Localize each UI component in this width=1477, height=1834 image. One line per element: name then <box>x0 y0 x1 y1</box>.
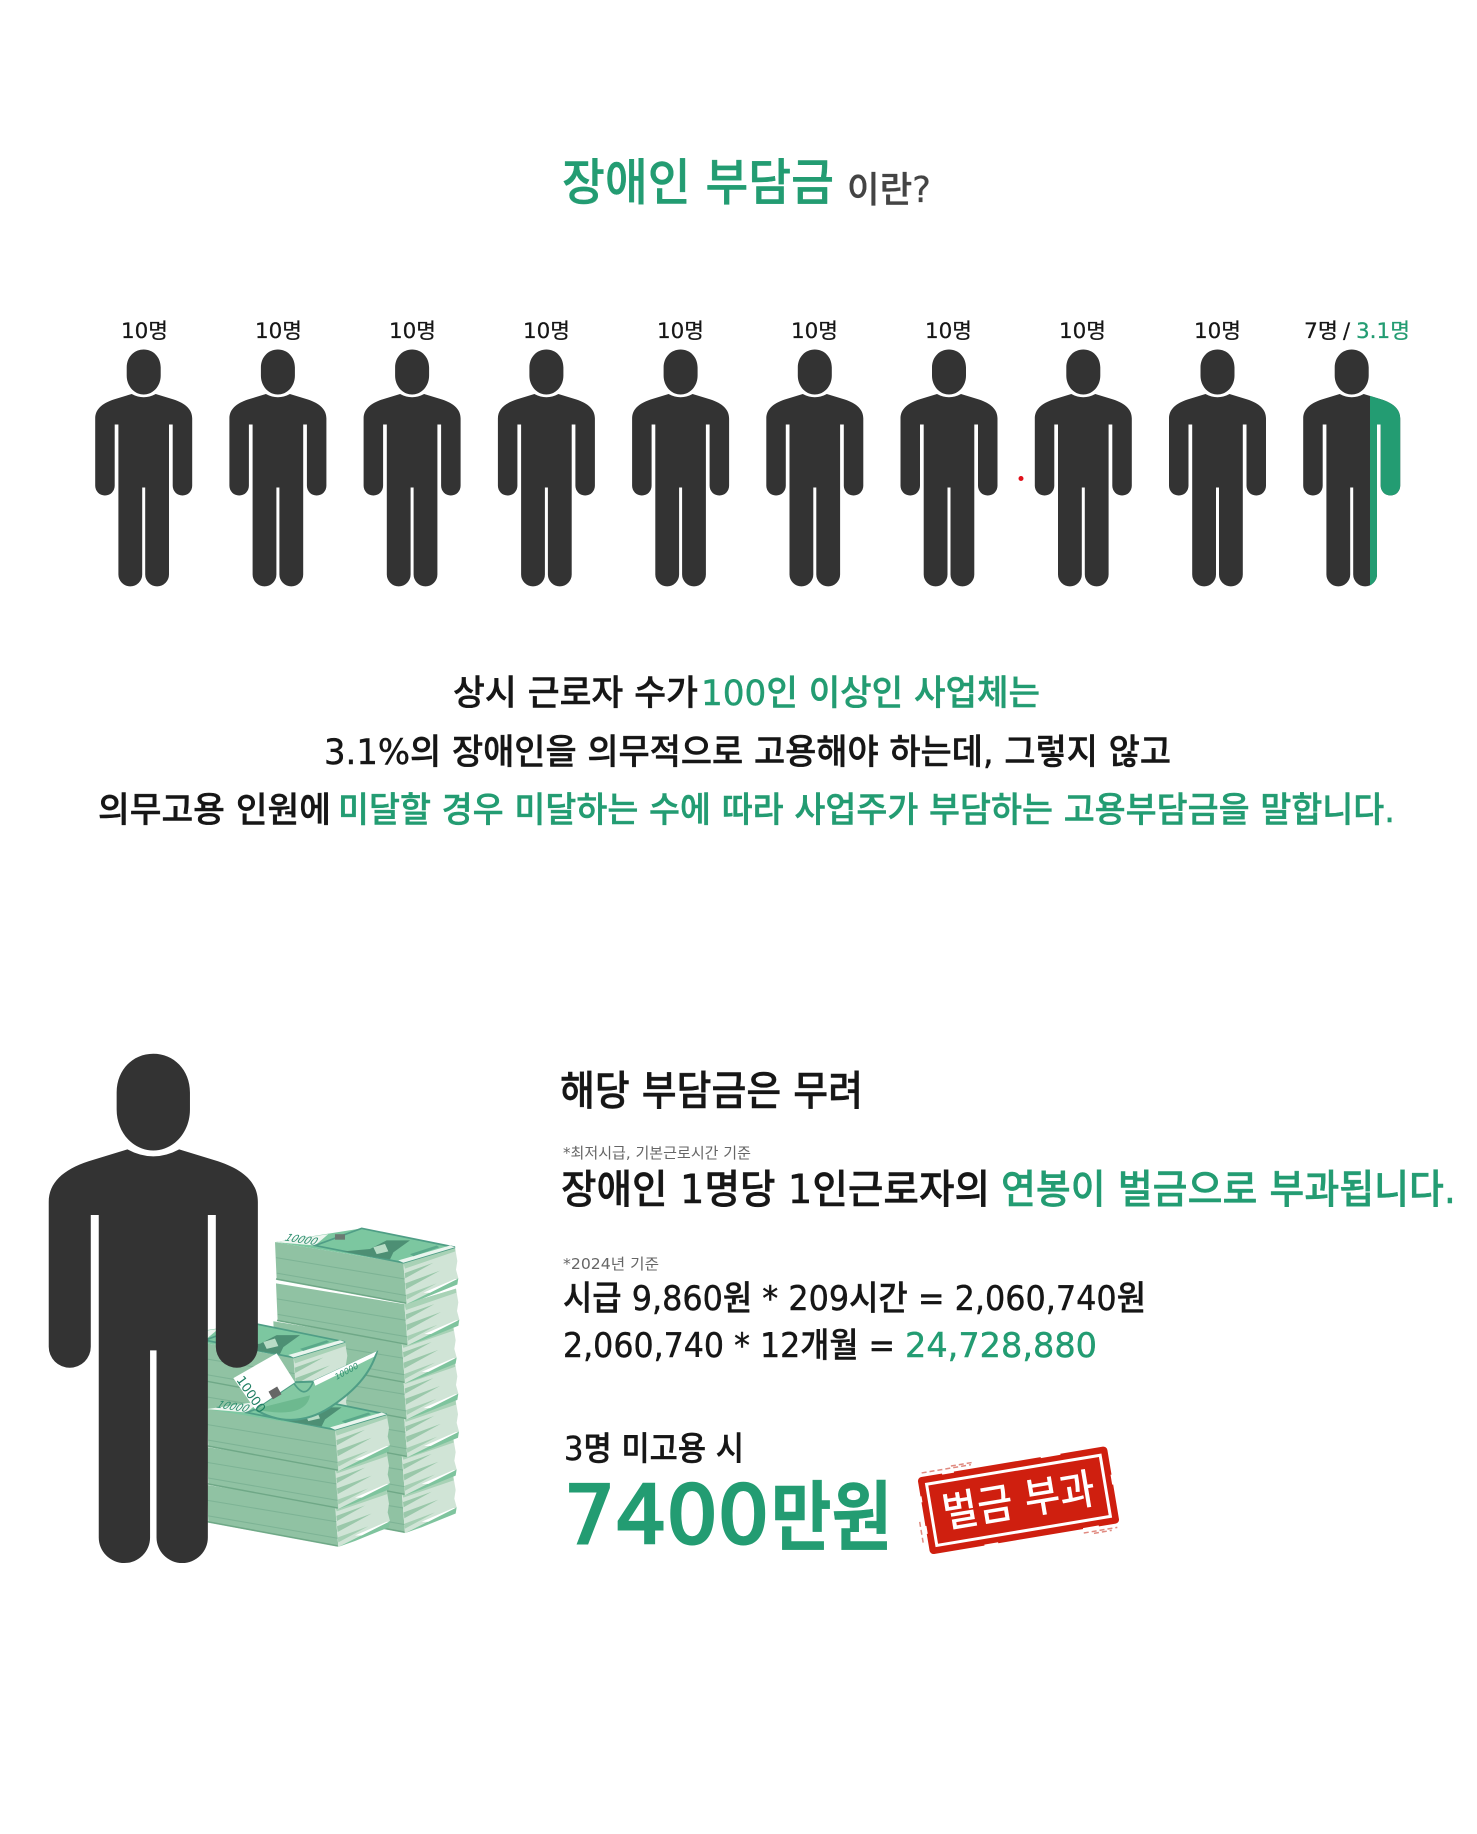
red dot <box>1018 476 1024 481</box>
calculation: 시급 9,860원 * 209시간 = 2,060,740원 <box>563 1279 1146 1319</box>
middle stack <box>165 1323 348 1437</box>
title: 장애인 부담금 <box>562 154 834 212</box>
flying banknote: 10000 <box>333 1360 360 1382</box>
large person icon <box>49 1054 258 1563</box>
person 8: 10명 <box>1059 319 1106 343</box>
explanation paragraph: 미달할 경우 미달하는 수에 따라 사업주가 부담하는 고용부담금을 말합니다. <box>338 791 1395 831</box>
person 2 <box>229 319 326 586</box>
person 9 <box>1169 319 1266 586</box>
stamp: 벌금 부과 <box>911 1440 1121 1561</box>
person 4 <box>498 319 595 586</box>
calculation: 2,060,740 * 12개월 = <box>563 1326 895 1366</box>
front stack: 10000 <box>213 1399 253 1415</box>
person 2: 10명 <box>255 319 302 343</box>
person 6 <box>766 319 863 586</box>
illustration: stacks of banknotes <box>165 1228 459 1547</box>
stamp: 벌금 부과: 벌금 부과 <box>939 1464 1099 1538</box>
person 7: 10명 <box>925 319 972 343</box>
front stack <box>207 1395 390 1547</box>
person 10: partially green: 3.1명 <box>1356 319 1410 343</box>
big number: 7400만원: 만원 <box>771 1473 892 1562</box>
person 10: partially green: / <box>1343 319 1351 343</box>
statement: 장애인 1명당 1인근로자의 <box>561 1167 990 1213</box>
big number: 7400만원: 7400 <box>564 1469 769 1562</box>
calculation: 24,728,880 <box>905 1326 1097 1366</box>
explanation paragraph: 의무고용 인원에 <box>98 791 331 831</box>
person 10: partially green: 7명 <box>1304 319 1338 343</box>
title: 이란? <box>847 170 931 211</box>
person 6: 10명 <box>791 319 838 343</box>
heading: 해당 부담금은 무려: 해당 부담금은 무려 <box>560 1067 863 1115</box>
person 3 <box>364 319 461 586</box>
footnote: 2024: *2024년 기준 <box>563 1255 659 1273</box>
person 5: 10명 <box>657 319 704 343</box>
person 1 <box>95 319 192 586</box>
person 3: 10명 <box>389 319 436 343</box>
statement <box>561 1167 1456 1213</box>
person 1: 10명 <box>121 319 168 343</box>
person 4: 10명 <box>523 319 570 343</box>
big number: 7400만원 <box>564 1469 892 1562</box>
flying banknote: 10000 <box>233 1373 268 1416</box>
flying banknote <box>233 1351 377 1420</box>
right stack <box>273 1228 459 1533</box>
statement: 연봉이 벌금으로 부과됩니다. <box>1001 1167 1456 1213</box>
footnote: minimum wage: *최저시급, 기본근로시간 기준 <box>563 1144 751 1162</box>
right stack: 10000 <box>281 1232 321 1248</box>
subheading: 3명 미고용 시: 3명 미고용 시 <box>564 1429 744 1468</box>
person 7 <box>900 319 998 586</box>
person 8 <box>1035 319 1132 586</box>
pictogram row: 10 workers <box>95 319 1410 586</box>
explanation paragraph: 100인 이상인 사업체는 <box>701 674 1040 714</box>
person 10: partially green <box>1303 319 1410 586</box>
calculation <box>563 1279 1146 1366</box>
explanation paragraph: 상시 근로자 수가 <box>453 674 698 714</box>
person 9: 10명 <box>1194 319 1241 343</box>
person 5 <box>632 319 729 586</box>
explanation paragraph <box>98 674 1395 831</box>
explanation paragraph: 3.1%의 장애인을 의무적으로 고용해야 하는데, 그렇지 않고 <box>324 733 1171 773</box>
